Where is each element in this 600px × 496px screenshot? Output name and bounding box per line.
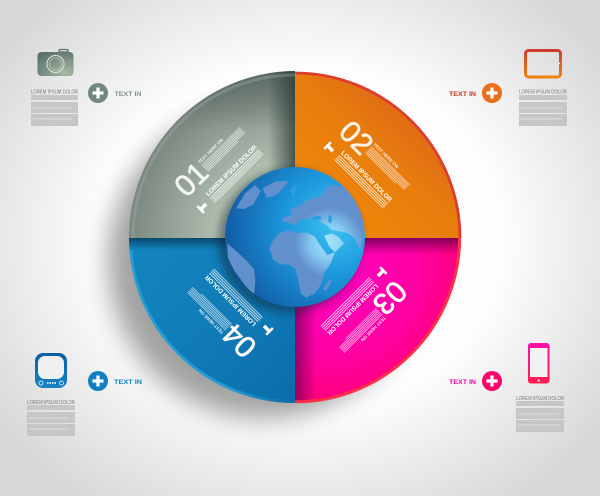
icon: segment 04 pin	[261, 323, 274, 336]
segment 04 content	[178, 267, 274, 364]
globe shadow	[218, 169, 362, 313]
paragraph lines 04	[187, 286, 232, 330]
icon: segment 02 pin	[323, 141, 336, 154]
number 03: 03	[366, 274, 413, 321]
icon: camera	[38, 50, 74, 76]
description blue: LOREM IPSUM DOLOR	[27, 400, 75, 406]
segment 02 content	[323, 115, 418, 210]
globe land: Greenland	[263, 181, 288, 198]
icon: segment 01 pin	[196, 201, 209, 214]
label blue: TEXT IN	[114, 379, 142, 386]
heading rule lines 02	[335, 155, 388, 208]
number 04: 04	[216, 317, 263, 364]
panel: orange quadrant 02	[295, 72, 461, 238]
globe land: South America	[227, 243, 255, 296]
description pink: LOREM IPSUM DOLOR	[516, 396, 564, 402]
globe land: Eurasia	[282, 185, 366, 250]
segment 01 content	[168, 118, 265, 214]
description orange: LOREM IPSUM DOLOR	[519, 90, 567, 96]
plus button gray	[88, 83, 108, 103]
panel: top-right tablet item	[449, 50, 567, 126]
icon: globe	[225, 167, 366, 307]
paragraph lines 02	[365, 147, 410, 191]
heading rule lines 04	[209, 269, 262, 322]
icon: tablet	[526, 50, 560, 77]
globe land: Arabia	[324, 233, 344, 252]
panel: gray quadrant 01	[129, 71, 295, 238]
heading 01: LOREM IPSUM DOLOR	[205, 144, 259, 198]
description gray: LOREM IPSUM DOLOR	[31, 90, 78, 96]
globe land: Africa	[269, 230, 335, 298]
panel: bottom-right phone item	[449, 343, 564, 432]
heading rule lines 03	[321, 278, 374, 331]
globe land: Madagascar	[323, 279, 332, 291]
paragraph lines 03	[338, 308, 382, 353]
globe land: North America	[236, 185, 261, 209]
number 01: 01	[168, 156, 215, 203]
label pink: TEXT IN	[449, 379, 476, 386]
caption 04: TEXT HERE ON	[198, 308, 225, 335]
panel: blue quadrant 04	[129, 238, 295, 403]
label red: TEXT IN	[449, 91, 476, 98]
plus button blue	[88, 371, 108, 391]
plus button orange	[482, 83, 502, 103]
drop shadow of the wheel	[108, 106, 420, 418]
icon: segment 03 pin	[375, 266, 388, 279]
plus button pink	[482, 371, 502, 391]
heading rule lines 01	[210, 149, 263, 202]
wheel	[129, 71, 461, 403]
caption 03: TEXT HERE ON	[360, 315, 387, 342]
caption 01: TEXT HERE ON	[197, 138, 224, 165]
heading 03: LOREM IPSUM DOLOR	[325, 282, 379, 336]
icon: retro screen device	[35, 353, 67, 388]
heading 02: LOREM IPSUM DOLOR	[339, 150, 393, 204]
heading 04: LOREM IPSUM DOLOR	[204, 273, 258, 327]
segment 03 content	[319, 266, 413, 359]
paragraph lines 01	[202, 127, 246, 172]
caption 02: TEXT HERE ON	[372, 142, 399, 169]
number 02: 02	[332, 115, 379, 162]
icon: phone	[528, 343, 550, 384]
panel: bottom-left device item	[27, 353, 142, 436]
label gray: TEXT IN	[114, 91, 142, 98]
panel: pink quadrant 03	[295, 238, 461, 403]
panel: top-left camera item	[31, 50, 142, 126]
globe inland seas	[290, 184, 332, 223]
